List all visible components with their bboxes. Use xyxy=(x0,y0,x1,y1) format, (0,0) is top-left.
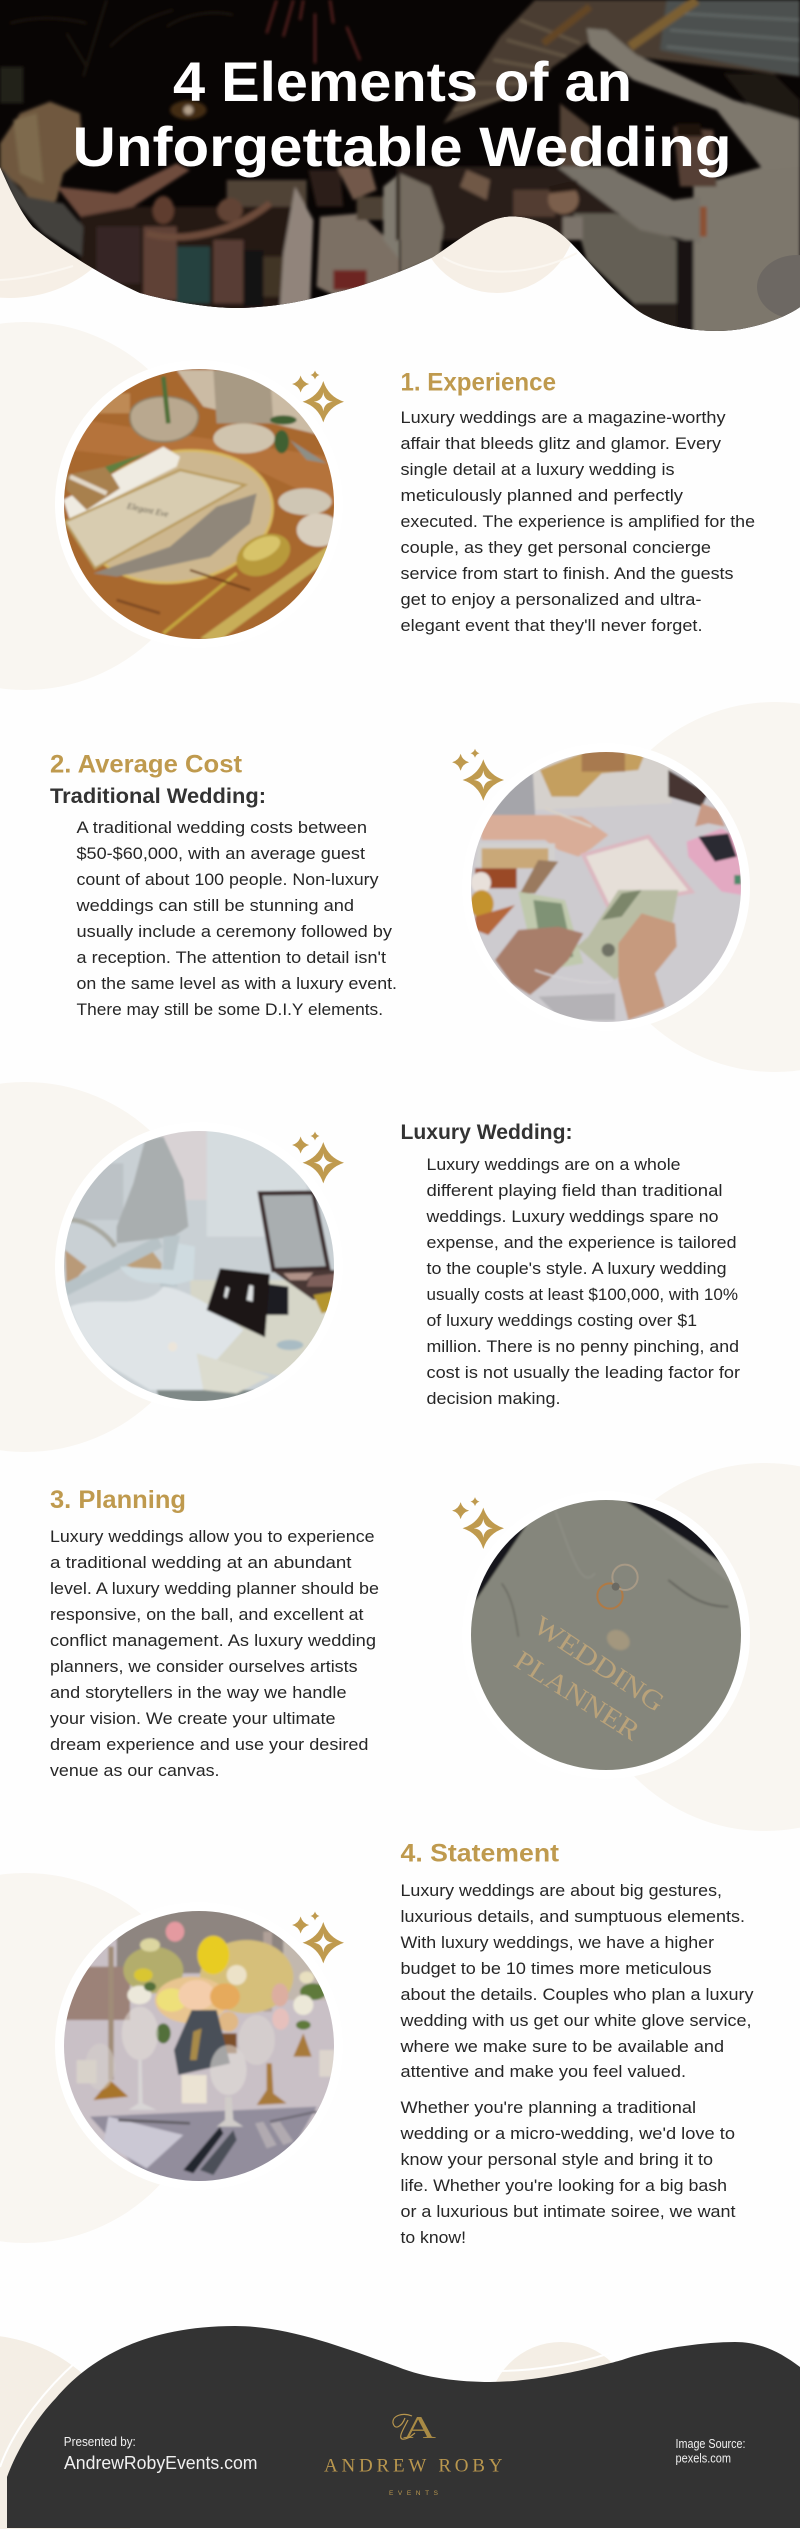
body text xyxy=(50,1527,379,1780)
photo: wedding planner with rings: PLANNER xyxy=(509,1645,646,1747)
background circle xyxy=(0,1873,210,2243)
icon: sparkles xyxy=(292,1912,344,1963)
title xyxy=(72,50,732,178)
body text: A traditional wedding costs between xyxy=(76,818,367,837)
closing paragraph: Whether you're planning a traditional xyxy=(400,2098,696,2117)
title: 4 Elements of an xyxy=(173,50,632,113)
section 2: traditional wedding cost xyxy=(50,702,800,1072)
body text: service from start to finish. And the guests xyxy=(400,564,734,583)
body text: a reception. The attention to detail isn't xyxy=(76,948,386,967)
background circle xyxy=(590,702,800,1072)
section 4: statement xyxy=(0,1840,754,2247)
photo: bridal shoes xyxy=(64,1131,334,1401)
presented by xyxy=(64,2435,257,2473)
image source: pexels.com xyxy=(676,2452,731,2466)
body text: usually include a ceremony followed by xyxy=(76,922,393,941)
body text: There may still be some D.I.Y elements. xyxy=(76,1000,383,1019)
body text: cost is not usually the leading factor for xyxy=(426,1363,740,1382)
body text: elegant event that they'll never forget. xyxy=(400,616,702,635)
title: Unforgettable Wedding xyxy=(72,115,732,178)
body text: With luxury weddings, we have a higher xyxy=(400,1933,714,1952)
body text: on the same level as with a luxury event. xyxy=(76,974,397,993)
body text: Luxury weddings are on a whole xyxy=(426,1155,680,1174)
background circle xyxy=(0,1082,210,1452)
photo ring xyxy=(55,1122,343,1410)
heading: 2. Average Cost xyxy=(50,750,243,778)
body text xyxy=(425,1155,740,1408)
logo xyxy=(324,2409,503,2497)
closing paragraph: to know! xyxy=(400,2228,466,2247)
photo: wedding planner with rings: WEDDING xyxy=(528,1610,670,1718)
background circle xyxy=(581,1463,800,1831)
background circle xyxy=(0,322,209,690)
header photo xyxy=(0,0,800,340)
photo ring xyxy=(462,743,750,1031)
body text: to the couple's style. A luxury wedding xyxy=(426,1259,726,1278)
body text: get to enjoy a personalized and ultra- xyxy=(400,590,702,609)
body text: where we make sure to be available and xyxy=(399,2037,724,2056)
body text xyxy=(75,818,397,1019)
header background blobs xyxy=(0,82,577,298)
icon: sparkles xyxy=(292,1132,344,1183)
body text xyxy=(399,1881,754,2081)
body text: weddings can still be stunning and xyxy=(75,896,354,915)
image source xyxy=(676,2437,746,2466)
body text: level. A luxury wedding planner should be xyxy=(50,1579,379,1598)
subheading: Luxury Wedding: xyxy=(400,1121,572,1144)
translucent circle in header xyxy=(757,255,800,319)
presented by: Presented by: xyxy=(64,2435,136,2449)
photo: table setting xyxy=(64,369,334,639)
heading: 4. Statement xyxy=(400,1840,560,1868)
closing paragraph: or a luxurious but intimate soiree, we want xyxy=(400,2202,736,2221)
footer panel xyxy=(7,2326,800,2528)
section 1: experience xyxy=(0,322,755,690)
body text: conflict management. As luxury wedding xyxy=(50,1631,376,1650)
body text: million. There is no penny pinching, and xyxy=(426,1337,739,1356)
section 2b: luxury wedding xyxy=(0,1082,740,1452)
closing paragraph: life. Whether you're looking for a big bash xyxy=(400,2176,727,2195)
body text: $50-$60,000, with an average guest xyxy=(76,844,365,863)
heading: 3. Planning xyxy=(50,1486,186,1514)
body text: responsive, on the ball, and excellent at xyxy=(50,1605,364,1624)
heading: 1. Experience xyxy=(400,368,556,396)
body text: your vision. We create your ultimate xyxy=(50,1709,336,1728)
body text: luxurious details, and sumptuous elements. xyxy=(400,1907,745,1926)
body text: about the details. Couples who plan a luxury xyxy=(400,1985,754,2004)
body text: decision making. xyxy=(426,1389,560,1408)
body text: a traditional wedding at an abundant xyxy=(50,1553,352,1572)
body text: and storytellers in the way we handle xyxy=(50,1683,346,1702)
body text: Luxury weddings allow you to experience xyxy=(50,1527,374,1546)
logo: ANDREW ROBY xyxy=(324,2456,503,2476)
photo: counting money xyxy=(471,752,741,1022)
body text: wedding with us get our white glove service, xyxy=(399,2011,752,2030)
monogram xyxy=(393,2409,436,2445)
body text xyxy=(400,408,755,635)
body text: different playing field than traditional xyxy=(426,1181,722,1200)
icon: sparkles xyxy=(292,370,344,422)
photo: wedding planner with rings xyxy=(471,1500,741,1770)
presented by: AndrewRobyEvents.com xyxy=(64,2453,258,2473)
body text: meticulously planned and perfectly xyxy=(400,486,684,505)
photo: table setting: Elegant Eve xyxy=(125,500,170,519)
body text: affair that bleeds glitz and glamor. Every xyxy=(400,434,722,453)
icon: sparkles xyxy=(452,1497,504,1549)
photo ring xyxy=(55,360,343,648)
footer xyxy=(0,2326,800,2529)
body text: count of about 100 people. Non-luxury xyxy=(76,870,379,889)
body text: single detail at a luxury wedding is xyxy=(400,460,674,479)
body text: executed. The experience is amplified for the xyxy=(400,512,755,531)
body text: dream experience and use your desired xyxy=(50,1735,368,1754)
monogram: A xyxy=(403,2409,436,2445)
closing paragraph xyxy=(399,2098,736,2247)
body text: of luxury weddings costing over $1 xyxy=(426,1311,697,1330)
closing paragraph: know your personal style and bring it to xyxy=(400,2150,713,2169)
body text: weddings. Luxury weddings spare no xyxy=(425,1207,718,1226)
body text: attentive and make you feel valued. xyxy=(400,2062,686,2081)
body text: venue as our canvas. xyxy=(50,1761,220,1780)
body text: couple, as they get personal concierge xyxy=(400,538,711,557)
body text: budget to be 10 times more meticulous xyxy=(400,1959,712,1978)
subheading: Traditional Wedding: xyxy=(50,785,266,808)
photo ring xyxy=(55,1902,343,2190)
image source: Image Source: xyxy=(676,2437,746,2451)
footer background blobs xyxy=(0,2335,634,2529)
body text: Luxury weddings are about big gestures, xyxy=(400,1881,722,1900)
closing paragraph: wedding or a micro-wedding, we'd love to xyxy=(399,2124,735,2143)
logo: EVENTS xyxy=(389,2490,439,2497)
body text: expense, and the experience is tailored xyxy=(426,1233,736,1252)
section 3: planning xyxy=(50,1463,800,1831)
icon: sparkles xyxy=(452,749,504,801)
body text: Luxury weddings are a magazine-worthy xyxy=(400,408,726,427)
photo: floral table setting xyxy=(64,1911,334,2181)
body text: planners, we consider ourselves artists xyxy=(50,1657,358,1676)
photo ring xyxy=(462,1491,750,1779)
body text: usually costs at least $100,000, with 10% xyxy=(426,1285,738,1304)
